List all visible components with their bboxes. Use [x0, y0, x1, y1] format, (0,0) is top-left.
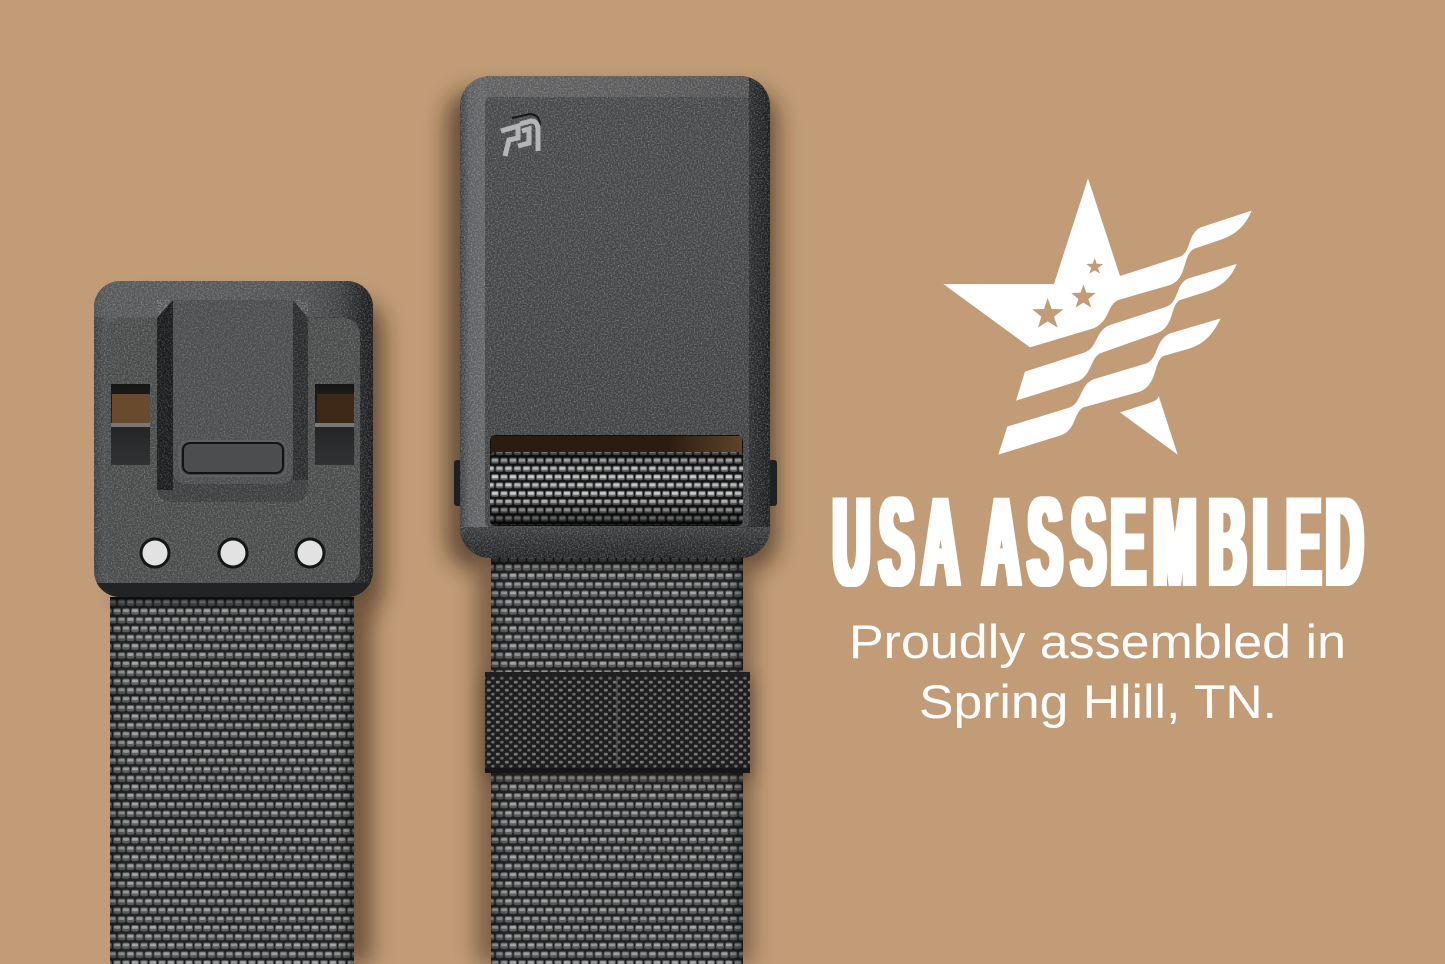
left buckle body — [94, 281, 373, 597]
belt slot — [490, 435, 743, 526]
rivet 2 — [218, 538, 248, 568]
third stripe — [998, 318, 1221, 455]
icon: star and stripes logo — [943, 178, 1252, 455]
side tabs — [454, 460, 777, 506]
heading: USA ASSEMBLED — [833, 474, 1363, 612]
lower star point — [1120, 396, 1178, 455]
shadows of right belt — [446, 90, 778, 964]
rivet 1 — [140, 538, 170, 568]
small stars — [1032, 258, 1103, 328]
shadows of left belt — [120, 300, 384, 964]
raised centre clip — [157, 300, 308, 502]
clip button — [180, 441, 286, 476]
right buckle body — [460, 76, 770, 558]
star with first stripe — [943, 178, 1252, 347]
subheading — [849, 615, 1346, 728]
logo mark — [501, 114, 540, 156]
rivet 3 — [294, 538, 326, 568]
subheading line 2: Spring Hlill, TN. — [919, 675, 1277, 728]
left strap window — [111, 384, 150, 465]
fabric keeper loop — [485, 672, 753, 778]
right strap window — [315, 384, 354, 465]
belt: right, buckle face — [446, 76, 778, 964]
right webbing strap — [491, 555, 743, 964]
left webbing strap — [110, 597, 354, 964]
belt: left, buckle underside — [94, 281, 384, 964]
subheading line 1: Proudly assembled in — [849, 615, 1346, 668]
second stripe — [1016, 264, 1237, 401]
